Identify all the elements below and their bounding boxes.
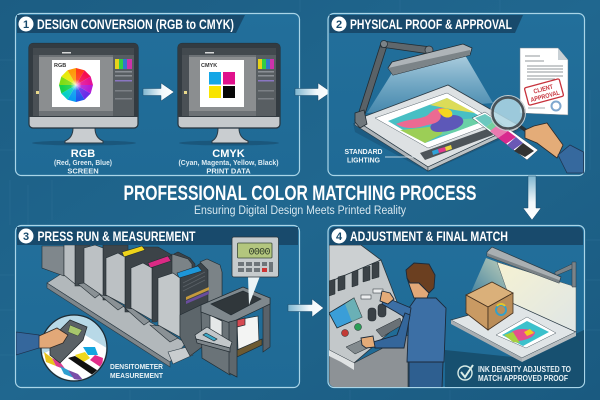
panel 4 heading: ADJUSTMENT & FINAL MATCH <box>350 229 508 244</box>
client approval stamp: CLIENT <box>533 84 554 96</box>
inspection table <box>353 85 522 172</box>
light cone <box>367 55 493 113</box>
arrow: step 1 to step 2 <box>295 83 331 101</box>
control console <box>329 245 408 388</box>
label: standard lighting <box>344 147 415 164</box>
press units <box>42 245 222 356</box>
control buttons <box>342 289 402 354</box>
panel 4 heading: 4 <box>336 231 343 243</box>
panel 1: design conversion <box>16 14 300 176</box>
client approval stamp: APPROVAL <box>530 90 561 104</box>
platform <box>47 272 193 367</box>
title block <box>124 181 476 217</box>
panel 3: press run and measurement <box>16 226 300 388</box>
arrow: step 3 to step 4 <box>288 299 324 317</box>
digital readout callout: 0000 <box>248 248 270 258</box>
meters <box>329 262 379 296</box>
panel 3 heading <box>17 227 298 245</box>
check icon and note: INK DENSITY ADJUSTED TO <box>478 365 571 374</box>
delivery unit with paper stack <box>195 287 270 377</box>
magnifier <box>490 96 534 136</box>
cardboard box <box>466 282 513 330</box>
approval document <box>520 48 568 115</box>
panel 3 heading: PRESS RUN & MEASUREMENT <box>38 229 196 244</box>
light booth <box>451 247 576 362</box>
rgb document with colour wheel: RGB <box>54 63 66 69</box>
panel 2 heading: PHYSICAL PROOF & APPROVAL <box>350 17 512 32</box>
check icon and note <box>458 365 571 383</box>
subtitle: Ensuring Digital Design Meets Printed Reality <box>194 205 406 217</box>
touch screen <box>329 298 362 328</box>
label: standard lighting: STANDARD <box>344 147 383 156</box>
label: RGB: RGB <box>71 148 95 160</box>
arrow: RGB to CMYK <box>143 83 174 101</box>
operator <box>361 263 446 388</box>
colourful proof print <box>388 98 487 143</box>
label: densitometer measurement <box>110 364 163 378</box>
client approval stamp <box>524 79 564 105</box>
hand and sleeve <box>525 123 584 173</box>
label: RGB: (Red, Green, Blue) <box>54 158 112 167</box>
label: densitometer measurement: MEASUREMENT <box>110 371 163 380</box>
panel 1 heading: 1 <box>23 19 29 31</box>
panel 3 heading: 3 <box>23 231 29 243</box>
check icon and note: MATCH APPROVED PROOF <box>478 374 568 383</box>
label: RGB <box>54 148 112 176</box>
approved print <box>496 317 556 348</box>
monitor: RGB <box>29 44 138 146</box>
densitometer inset <box>16 315 110 385</box>
panel 2 heading <box>330 15 523 33</box>
panel 4: adjustment and final match <box>328 226 584 388</box>
label: CMYK: (Cyan, Magenta, Yellow, Black) <box>178 158 279 167</box>
label: CMYK: PRINT DATA <box>206 166 251 176</box>
panel 1 heading <box>17 15 245 33</box>
main title: PROFESSIONAL COLOR MATCHING PROCESS <box>124 181 476 205</box>
label: densitometer measurement: DENSITOMETER <box>110 362 164 371</box>
colour swatch strip <box>472 112 538 160</box>
panel 2 heading: 2 <box>336 19 342 31</box>
digital readout callout <box>232 237 278 305</box>
label: CMYK <box>178 148 279 176</box>
arrow: step 2 to step 4 <box>523 176 541 220</box>
label: RGB: SCREEN <box>67 166 99 176</box>
panel 1 heading: DESIGN CONVERSION (RGB to CMYK) <box>37 17 234 32</box>
monitor: CMYK <box>178 44 280 146</box>
panel 4 heading <box>330 227 583 245</box>
label: CMYK: CMYK <box>212 148 245 160</box>
printing press <box>16 245 270 385</box>
panel 2: physical proof and approval <box>328 14 584 176</box>
label: standard lighting: LIGHTING <box>347 156 380 164</box>
cmyk document with swatches: CMYK <box>201 63 217 69</box>
lamp arm and head <box>355 40 472 128</box>
